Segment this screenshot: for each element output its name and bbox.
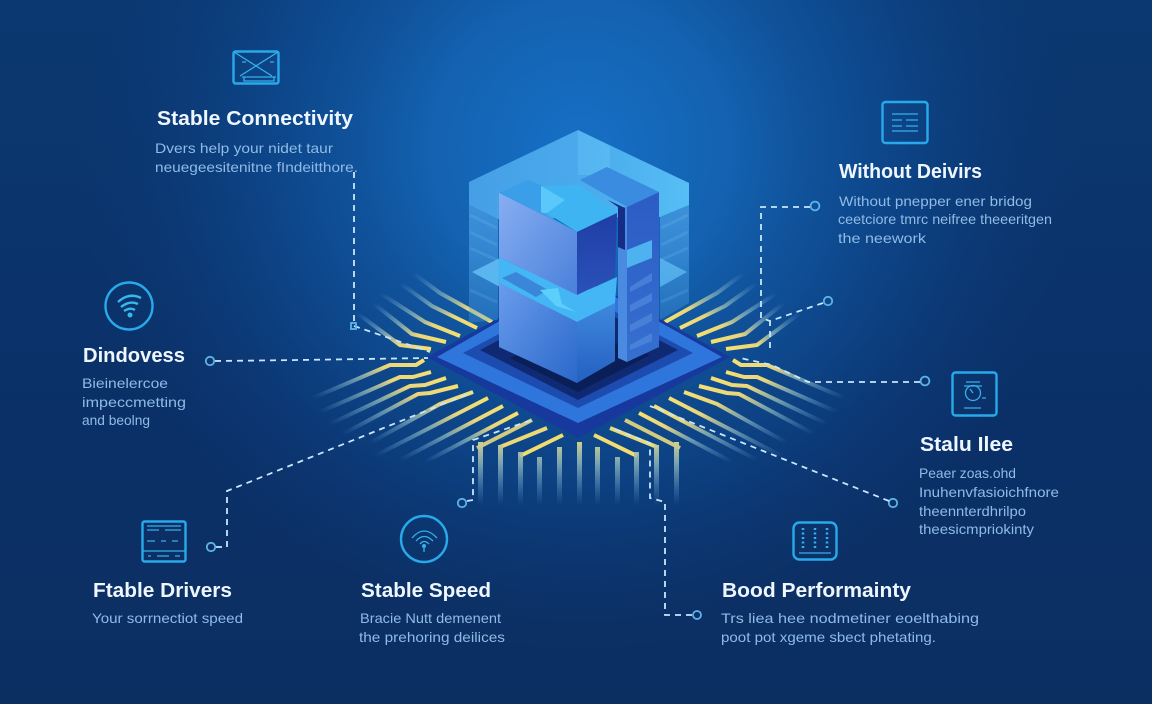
connector: stable speed bbox=[458, 420, 532, 507]
heading: Stalu Ilee bbox=[920, 434, 1013, 456]
text block: Trs liea hee nodmetiner eoelthabing bbox=[721, 610, 979, 626]
panel: without drivers bbox=[838, 102, 1052, 246]
panel: dindovess bbox=[82, 282, 186, 428]
server tower bbox=[580, 167, 659, 362]
text block: Bieinelercoe bbox=[82, 375, 168, 391]
icon: wifi circle bbox=[106, 282, 152, 330]
heading: Dindovess bbox=[83, 345, 185, 367]
heading: Bood Performainty bbox=[722, 580, 912, 602]
upper block bbox=[499, 180, 617, 295]
text block: Bracie Nutt demenent bbox=[360, 610, 501, 626]
chip base bbox=[427, 275, 730, 438]
text block: theesicmpriokinty bbox=[919, 521, 1034, 537]
panel: ftable drivers bbox=[92, 522, 243, 626]
text block: Without pnepper ener bridog bbox=[839, 193, 1032, 209]
text block: poot pot xgeme sbect phetating. bbox=[721, 629, 936, 645]
connector: stalu upper bbox=[740, 358, 929, 385]
connector: without drivers bbox=[761, 202, 819, 321]
panel: stalu ilee bbox=[919, 372, 1059, 537]
connector: bood performance bbox=[612, 428, 701, 619]
text block: the prehoring deilices bbox=[359, 629, 505, 645]
text block: neuegeesitenitne fIndeitthore. bbox=[155, 159, 358, 175]
connector: middle right bbox=[770, 297, 832, 352]
icon: data columns bbox=[794, 522, 836, 560]
panel: bood performance bbox=[721, 522, 979, 645]
text block: Your sorrnectiot speed bbox=[92, 610, 243, 626]
circuit traces bbox=[313, 273, 844, 507]
heading: Stable Speed bbox=[361, 580, 491, 602]
lower block bbox=[499, 257, 617, 383]
connector: dindovess bbox=[206, 357, 428, 365]
heading: Stable Connectivity bbox=[157, 108, 354, 130]
connector: stalu lower bbox=[650, 406, 897, 507]
heading: Without Deivirs bbox=[839, 161, 982, 183]
text block: the neework bbox=[838, 230, 927, 246]
panel: stable connectivity bbox=[155, 52, 358, 175]
text block: theennterdhrilpo bbox=[919, 503, 1026, 519]
text block: ceetciore tmrc neifree theeeritgen bbox=[838, 211, 1052, 227]
icon: document lines bbox=[882, 102, 928, 143]
text block: impeccmetting bbox=[82, 394, 186, 410]
text block: Peaer zoas.ohd bbox=[919, 465, 1016, 481]
icon: gauge square bbox=[952, 372, 996, 416]
icon: network envelope bbox=[234, 52, 278, 84]
text block: and beolng bbox=[82, 412, 150, 428]
connector: ftable drivers bbox=[207, 392, 473, 551]
text block: Inuhenvfasioichfnore bbox=[919, 484, 1059, 500]
glass cube bbox=[469, 130, 689, 323]
icon: driver screen bbox=[142, 522, 186, 562]
connector: stable connectivity bbox=[351, 172, 430, 352]
heading: Ftable Drivers bbox=[93, 580, 232, 602]
panel: stable speed bbox=[359, 516, 505, 645]
icon: speed signal circle bbox=[401, 516, 447, 562]
text block: Dvers help your nidet taur bbox=[155, 140, 333, 156]
